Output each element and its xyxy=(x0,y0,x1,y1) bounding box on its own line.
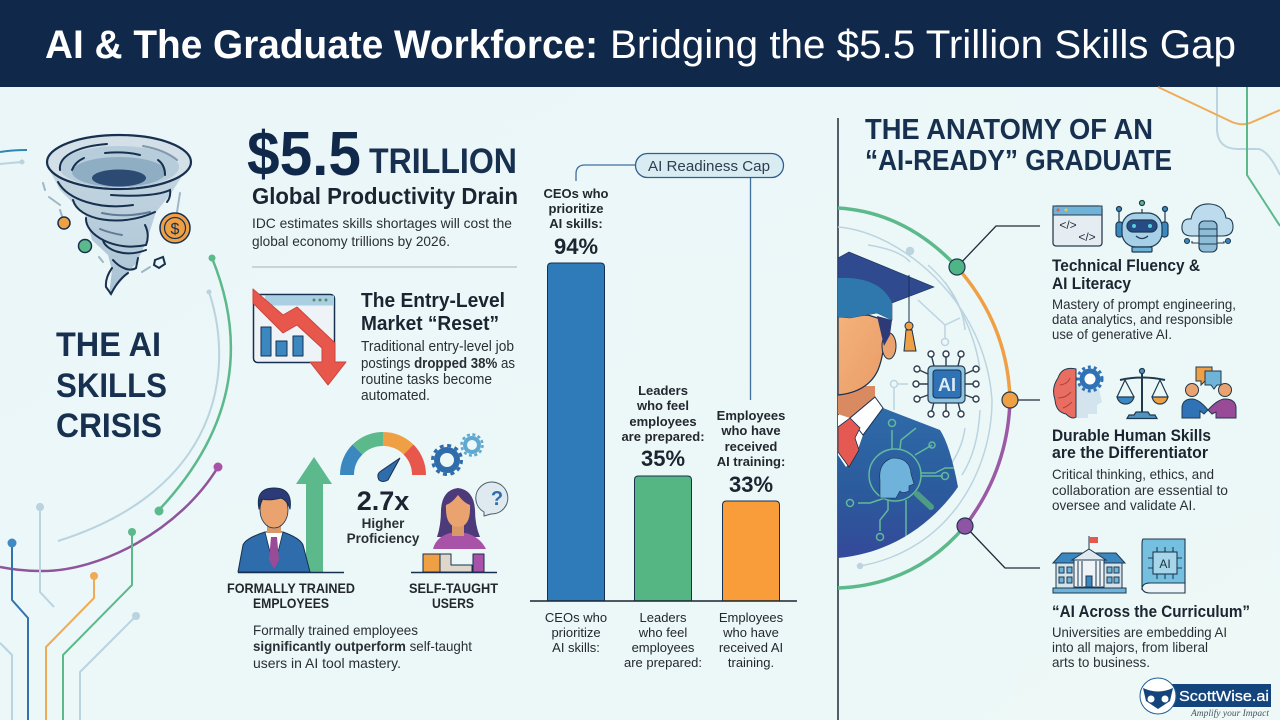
heading: the AI skills crisis: CRISIS xyxy=(56,407,162,445)
text block: entry-level reset: Traditional entry-level job xyxy=(361,339,514,355)
bar: employees 33%: received xyxy=(725,439,777,454)
icon: people collaborating xyxy=(1182,367,1236,418)
axis labels xyxy=(545,610,784,670)
jacket xyxy=(838,408,958,558)
axis labels: AI skills: xyxy=(552,640,600,655)
text block: entry-level reset: The Entry-Level xyxy=(361,290,505,312)
comparison labels: FORMALLY TRAINED xyxy=(227,580,355,596)
heading: anatomy of an AI-ready graduate xyxy=(865,114,1172,177)
logo: ScottWise.ai xyxy=(1140,678,1271,719)
bar: employees 33%: who have xyxy=(720,423,781,438)
icon: proficiency gauge xyxy=(347,439,419,482)
panel: technical fluency: use of generative AI. xyxy=(1052,326,1172,342)
text block: trained employees outperform: Formally trained employees xyxy=(253,622,418,638)
text block: entry-level reset xyxy=(361,290,515,404)
comparison labels: USERS xyxy=(432,595,474,611)
proficiency stat xyxy=(347,486,420,546)
bar: employees 33%: Employees xyxy=(717,408,785,423)
panel: technical fluency: Mastery of prompt engineering, xyxy=(1052,296,1236,312)
text block: trained employees outperform: significantly outperform self-taught xyxy=(253,638,472,654)
text block: entry-level reset: routine tasks become xyxy=(361,372,492,388)
icon: self-taught user xyxy=(411,482,508,572)
graduation cap xyxy=(838,252,934,320)
heading: the AI skills crisis: THE AI xyxy=(56,326,161,364)
axis labels: employees xyxy=(632,640,695,655)
proficiency stat: Higher xyxy=(362,516,405,531)
icon: university building xyxy=(1053,536,1126,593)
bar: CEOs 94%: 94% xyxy=(554,234,598,259)
top right decoration xyxy=(1158,87,1280,226)
subheading: Global Productivity Drain xyxy=(252,183,518,209)
panel: AI across the curriculum: Universities are embedding AI xyxy=(1052,624,1227,640)
bar: leaders 35%: are prepared: xyxy=(621,429,705,444)
text: AI Literacy xyxy=(1052,275,1132,293)
panel: technical fluency xyxy=(1052,200,1236,342)
text: “AI Across the Curriculum” xyxy=(1052,603,1250,621)
icon: code window: </> xyxy=(1059,218,1077,232)
text: are the Differentiator xyxy=(1052,444,1209,462)
logo: ScottWise.ai: Amplify your Impact xyxy=(1190,708,1269,719)
axis labels: are prepared: xyxy=(624,655,702,670)
icon: cloud database xyxy=(1182,204,1233,252)
illustration: graduate xyxy=(838,227,992,568)
panel: durable human skills: collaboration are essential to xyxy=(1052,482,1228,498)
panel: durable human skills xyxy=(1052,367,1236,513)
axis labels: prioritize xyxy=(551,625,601,640)
bar: leaders 35%: employees xyxy=(629,414,697,429)
icon: falling chart window xyxy=(253,289,346,385)
arc with nodes and connectors xyxy=(838,208,1040,588)
panel: durable human skills: Critical thinking, ethics, and xyxy=(1052,466,1214,482)
text block: trained employees outperform xyxy=(253,622,472,671)
bar: employees 33% xyxy=(717,408,785,601)
callout: AI readiness cap xyxy=(576,154,784,400)
panel: global productivity drain xyxy=(247,120,518,249)
icon: self-taught user: ? xyxy=(491,488,503,510)
text block: entry-level reset: Market “Reset” xyxy=(361,313,499,335)
bar: CEOs 94%: AI skills: xyxy=(549,216,603,231)
text block: trained employees outperform: users in AI tool mastery. xyxy=(253,655,401,671)
text block: entry-level reset: automated. xyxy=(361,388,430,404)
bar: CEOs 94%: CEOs who xyxy=(543,186,609,201)
bar: leaders 35%: who feel xyxy=(636,398,689,413)
axis labels: CEOs who xyxy=(545,610,607,625)
text xyxy=(1052,257,1200,293)
panel: AI across the curriculum xyxy=(1052,536,1250,670)
panel: AI across the curriculum: arts to business. xyxy=(1052,654,1150,670)
logo: ScottWise.ai: ScottWise.ai xyxy=(1179,688,1269,705)
heading: the AI skills crisis: SKILLS xyxy=(56,367,167,405)
bar chart: AI readiness gap xyxy=(530,154,797,670)
neck and face xyxy=(838,386,875,418)
bar: leaders 35%: Leaders xyxy=(638,383,688,398)
axis labels: who feel xyxy=(638,625,687,640)
comparison labels: EMPLOYEES xyxy=(253,595,329,611)
left circuit decoration xyxy=(0,150,231,720)
icon: code window: </> xyxy=(1078,230,1096,244)
icon: robot xyxy=(1116,200,1168,252)
bar: employees 33%: 33% xyxy=(729,472,773,497)
panel: AI across the curriculum: into all majors, from liberal xyxy=(1052,639,1208,655)
icon: AI book: AI xyxy=(1159,557,1171,571)
collar and tie xyxy=(838,415,863,467)
icon: code window xyxy=(1053,206,1102,246)
icon: AI book xyxy=(1142,539,1185,593)
heading: anatomy of an AI-ready graduate: THE ANATOMY OF AN xyxy=(865,114,1153,146)
heading: the AI skills crisis xyxy=(56,326,167,445)
header banner xyxy=(0,0,1280,87)
icon: AI chip: AI xyxy=(938,375,956,395)
bar: CEOs 94%: prioritize xyxy=(549,201,603,216)
text xyxy=(1052,427,1211,462)
icon: gears xyxy=(432,434,482,474)
panel: durable human skills: oversee and validate AI. xyxy=(1052,497,1196,513)
proficiency stat: Proficiency xyxy=(347,531,420,546)
bar: CEOs 94% xyxy=(543,186,609,601)
text: Durable Human Skills xyxy=(1052,427,1211,445)
axis labels: Leaders xyxy=(640,610,687,625)
comparison labels: SELF-TAUGHT xyxy=(409,580,498,596)
icon: scales xyxy=(1117,368,1168,418)
big number: $5.5 xyxy=(247,120,361,189)
description: IDC estimates skills shortages will cost the xyxy=(252,215,512,231)
description xyxy=(252,215,512,249)
bar: leaders 35%: 35% xyxy=(641,446,685,471)
heading: anatomy of an AI-ready graduate: “AI-READY” GRADUATE xyxy=(865,145,1172,177)
description: global economy trillions by 2026. xyxy=(252,233,450,249)
icon: formally trained employee with arrow xyxy=(238,457,344,572)
axis labels: Employees xyxy=(719,610,784,625)
tassel xyxy=(908,275,910,322)
axis labels: received AI xyxy=(719,640,783,655)
proficiency stat: 2.7x xyxy=(357,486,409,516)
circuit arcs xyxy=(838,227,992,568)
icon: AI chip xyxy=(913,351,979,417)
icon: brain and gear xyxy=(1054,367,1102,418)
title: Bridging the $5.5 Trillion Skills Gap xyxy=(610,23,1236,67)
title: AI & The Graduate Workforce: xyxy=(45,23,598,67)
panel: technical fluency: data analytics, and responsible xyxy=(1052,311,1233,327)
axis labels: training. xyxy=(728,655,774,670)
unit: TRILLION xyxy=(369,142,517,181)
axis labels: who have xyxy=(722,625,779,640)
comparison labels xyxy=(227,580,498,611)
text: Technical Fluency & xyxy=(1052,257,1200,275)
bar: leaders 35% xyxy=(621,383,705,601)
callout: AI readiness cap: AI Readiness Cap xyxy=(648,158,770,175)
bar: employees 33%: AI training: xyxy=(717,454,785,469)
text block: entry-level reset: postings dropped 38% as xyxy=(361,356,515,372)
icon: tornado xyxy=(43,135,191,295)
icon: tornado: $ xyxy=(171,221,180,238)
